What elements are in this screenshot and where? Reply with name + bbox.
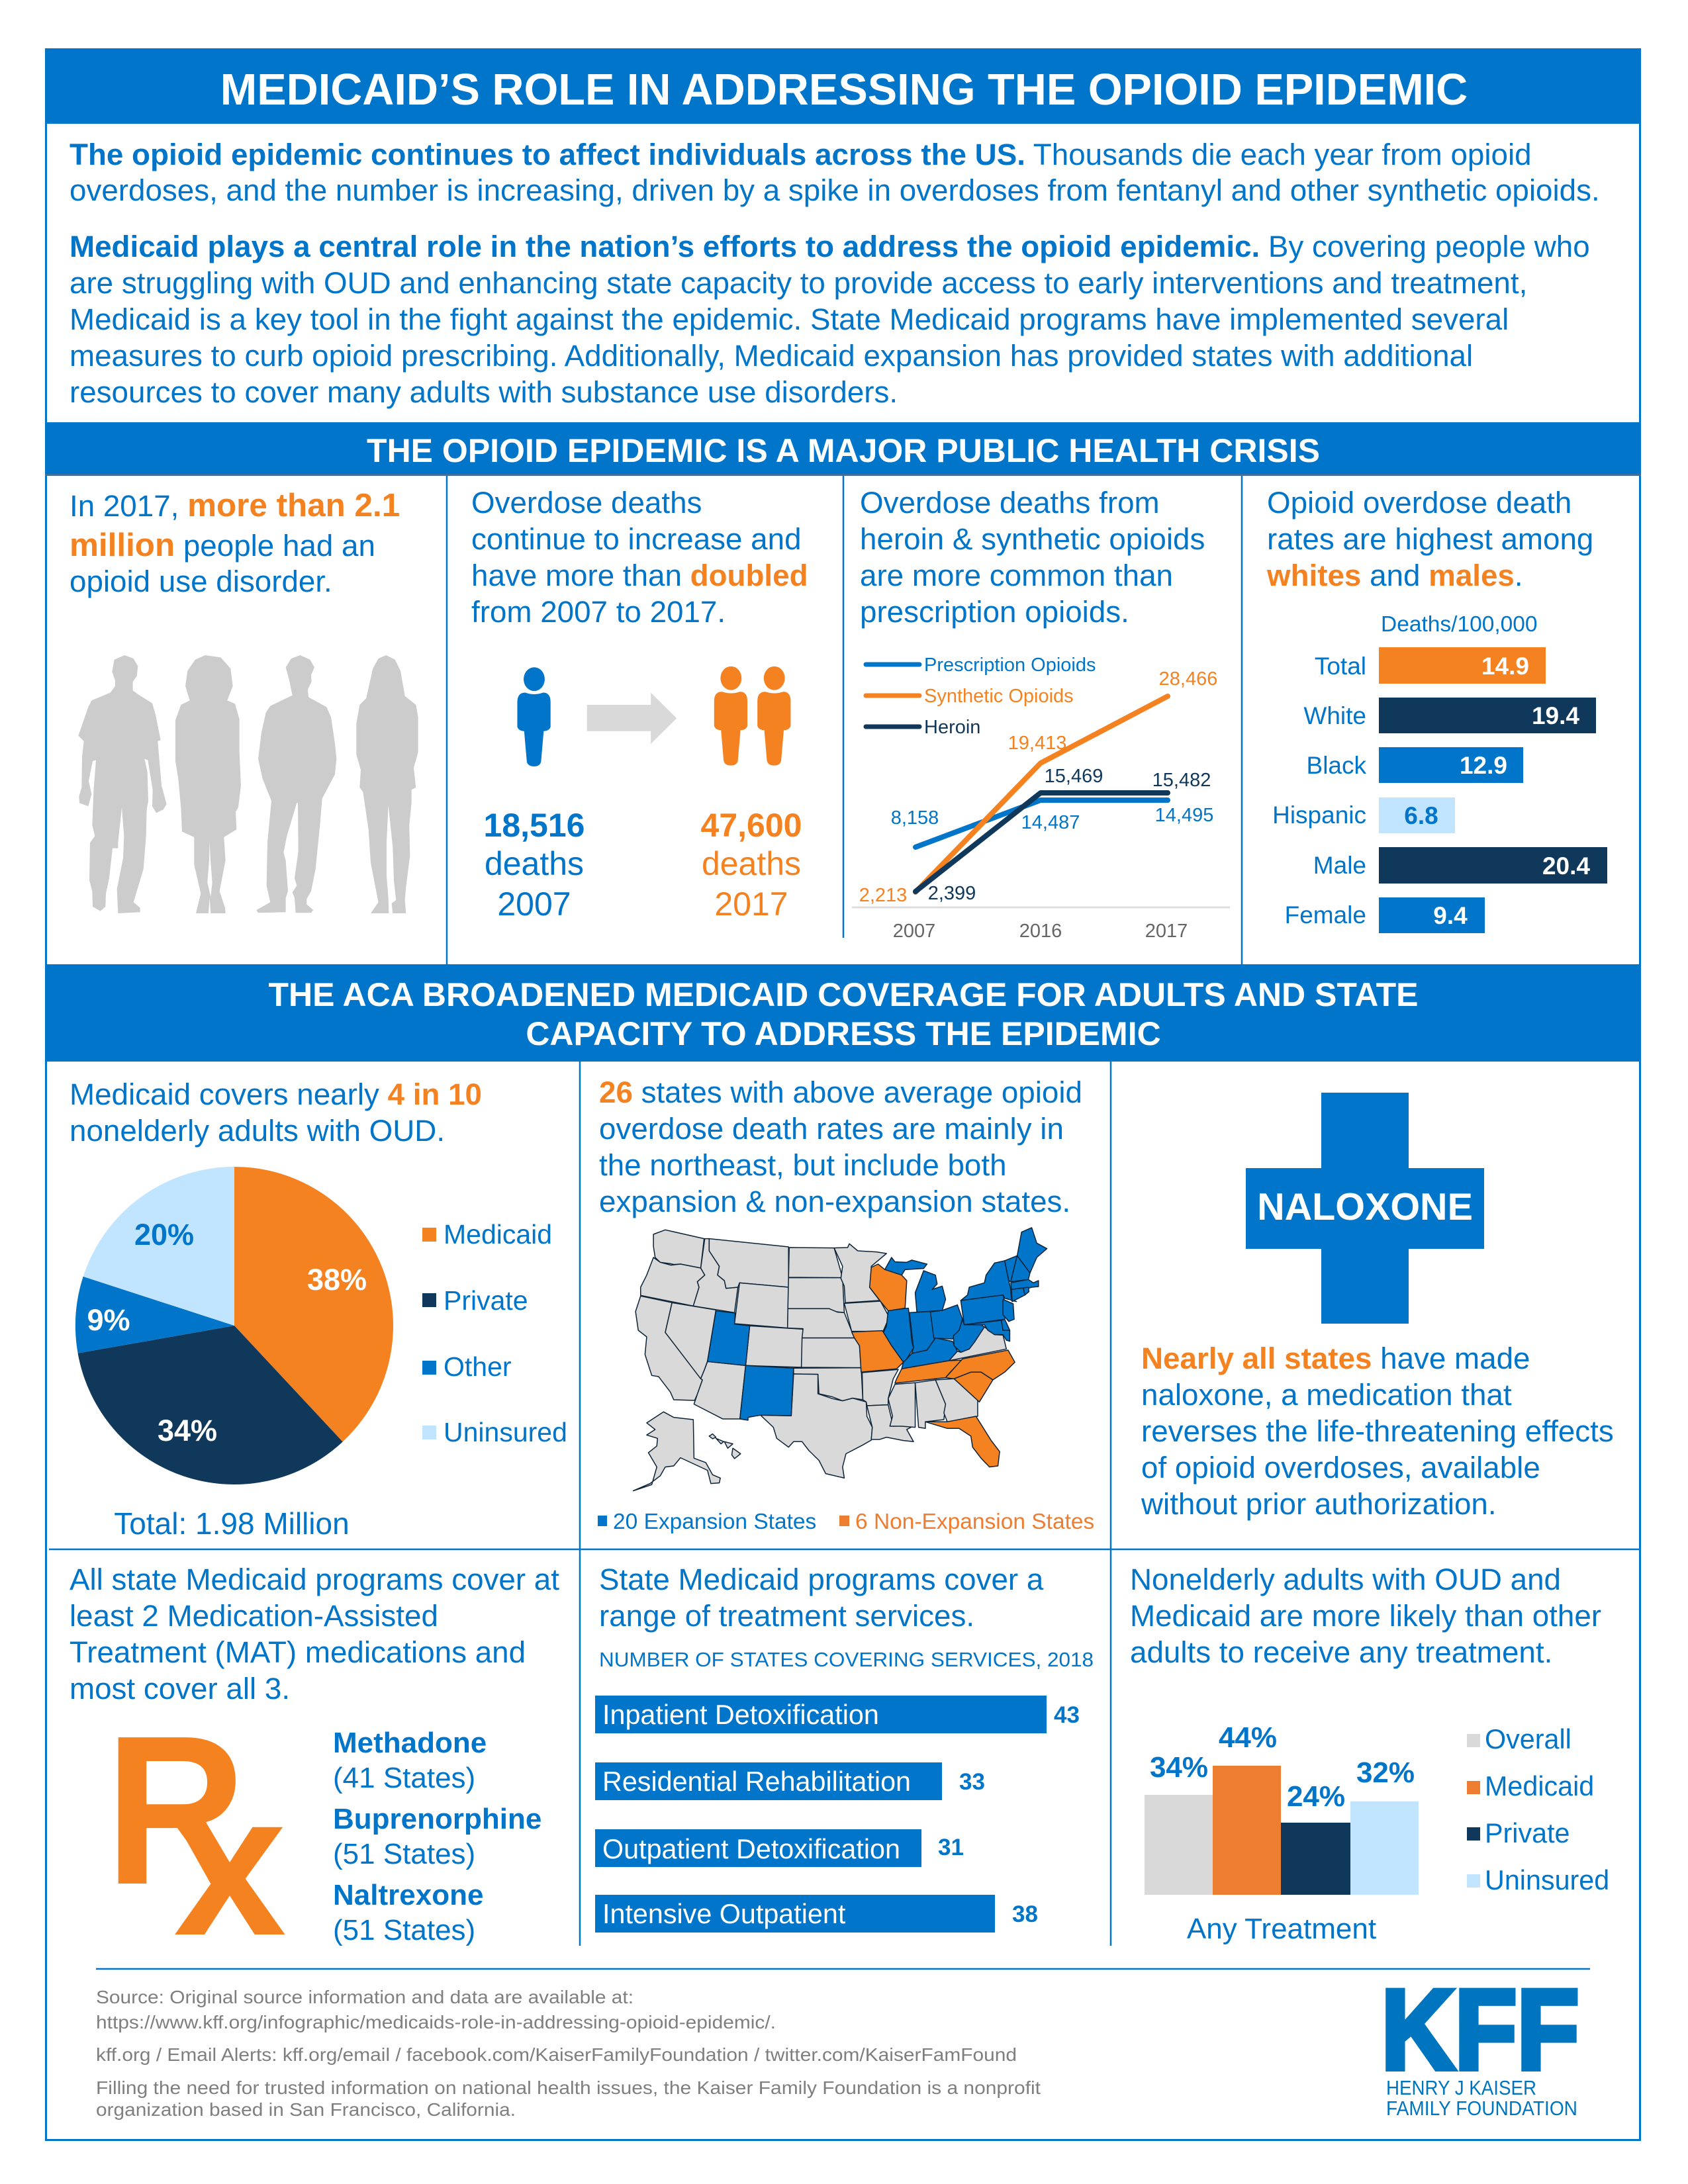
bar chart: deaths per 100,000: 12.9 (1460, 752, 1507, 779)
panel text: whites and males: whites and males. (1266, 559, 1523, 592)
bar chart: deaths per 100,000: 9.4 (1433, 902, 1468, 929)
line chart: overdose deaths by opioid: 8,158 (891, 807, 939, 829)
medication list: Methadone (333, 1727, 487, 1759)
line chart: overdose deaths by opioid: 19,413 (1008, 733, 1066, 754)
panel text: 26 states: overdose death rates are mainly in (599, 1112, 1064, 1146)
panel text: whites and males: Opioid overdose death (1267, 486, 1571, 520)
map legend: 6 Non-Expansion States (855, 1510, 1094, 1534)
panel text: deaths doubled: Overdose deaths (471, 486, 702, 520)
icon: person 2007 (517, 667, 551, 766)
panel text: MAT coverage: least 2 Medication-Assisted (70, 1599, 438, 1633)
panel: death rates by group (1266, 486, 1607, 933)
panel text: deaths doubled: have more than doubled (471, 559, 808, 592)
footer text: https://www.kff.org/infographic/medicaids-role-in-addressing-opioid-epidemic/. (96, 2012, 776, 2032)
line chart: overdose deaths by opioid: 2,213 (859, 885, 907, 906)
bar legend (1467, 1724, 1609, 1895)
bar chart: states covering services: Residential Rehabilitation (602, 1766, 911, 1797)
bar chart: deaths per 100,000: Deaths/100,000 (1381, 612, 1538, 637)
medication list (333, 1727, 541, 1946)
stat: 2017 deaths: 47,600 (701, 807, 802, 844)
section heading: public health crisis (45, 422, 1641, 476)
pie legend: Other (444, 1351, 512, 1382)
line chart: overdose deaths by opioid: 15,469 (1045, 766, 1103, 787)
panel text: deaths doubled (471, 486, 808, 629)
section heading: ACA broadened coverage: THE ACA BROADENED MEDICAID COVERAGE FOR ADULTS AND STATE (268, 976, 1419, 1013)
line chart: overdose deaths by opioid: 2016 (1019, 921, 1062, 942)
bar chart: any treatment: Any Treatment (1187, 1913, 1376, 1945)
intro text: The opioid epidemic continues to affect individuals across the US. Thousands die each year from opioid (70, 138, 1532, 171)
panel text: heroin and synthetic (860, 486, 1205, 629)
footer text (96, 1987, 1041, 2120)
map legend (598, 1510, 1094, 1534)
medication list: (41 States) (333, 1762, 475, 1794)
icon: Rx symbol: x (173, 1751, 288, 1978)
panel: MAT medications (70, 1563, 559, 1978)
line chart: overdose deaths by opioid: 15,482 (1152, 770, 1211, 791)
pie chart: coverage of adults with OUD (75, 1167, 393, 1484)
intro text: are struggling with OUD and enhancing state capacity to provide access to early interventions and treatment, (70, 266, 1527, 300)
logo: KFF: KFF (1381, 1966, 1579, 2093)
panel text: heroin and synthetic: are more common than (860, 559, 1173, 592)
intro text: Medicaid plays a central role in the nation’s efforts to address the opioid epidemic. By covering people who (70, 230, 1590, 263)
panel text: naloxone availability: of opioid overdoses, available (1141, 1451, 1540, 1484)
panel text: OUD statement (70, 487, 400, 598)
line chart: overdose deaths by opioid: 2007 (893, 921, 935, 942)
panel text: 26 states: 26 states with above average opioid (599, 1075, 1082, 1109)
panel text: naloxone availability: Nearly all states have made (1141, 1342, 1530, 1375)
bar chart: deaths per 100,000: White (1303, 702, 1366, 729)
panel text: MAT coverage: most cover all 3. (70, 1672, 290, 1706)
icon: two people 2017 (714, 666, 790, 766)
panel text: MAT coverage: All state Medicaid programs cover at (70, 1563, 559, 1596)
line chart: overdose deaths by opioid: 2,399 (928, 883, 976, 904)
logo: KFF: HENRY J KAISER (1386, 2076, 1536, 2099)
icon: naloxone cross: NALOXONE (1257, 1186, 1473, 1228)
bar chart: deaths per 100,000: Male (1313, 852, 1366, 879)
map: United States by expansion status (633, 1228, 1047, 1491)
panel text: treatment services: range of treatment services. (599, 1599, 974, 1633)
intro text: resources to cover many adults with substance use disorders. (70, 375, 898, 409)
line chart: overdose deaths by opioid (852, 655, 1230, 942)
bar chart: any treatment: 32% (1356, 1756, 1415, 1789)
chart subtitle: NUMBER OF STATES COVERING SERVICES, 2018 (599, 1648, 1094, 1671)
icon: Rx symbol (105, 1692, 288, 1978)
line chart: overdose deaths by opioid: Prescription Opioids (924, 655, 1096, 676)
map legend: 20 Expansion States (613, 1510, 816, 1534)
line chart: overdose deaths by opioid: Synthetic Opioids (924, 686, 1074, 707)
panel: overdose deaths doubled (471, 486, 808, 923)
panel text: 4 in 10: Medicaid covers nearly 4 in 10 (70, 1077, 482, 1111)
medication list: (51 States) (333, 1838, 475, 1870)
panel: treatment services (595, 1563, 1094, 1933)
bar chart: deaths per 100,000 (1272, 612, 1607, 933)
title banner (45, 48, 1641, 124)
pie total: Total: 1.98 Million (114, 1506, 350, 1541)
line chart: overdose deaths by opioid: Heroin (924, 717, 980, 738)
panel text: any treatment: adults to receive any treatment. (1130, 1635, 1552, 1669)
icon: four people silhouettes (78, 655, 418, 913)
stat: 2007 deaths: deaths (485, 845, 584, 882)
intro text: Medicaid is a key tool in the fight against the epidemic. State Medicaid programs have implemented several (70, 302, 1509, 336)
panel text: OUD statement: million people had an (70, 527, 375, 563)
medication list: Naltrexone (333, 1879, 483, 1911)
pie chart: coverage of adults with OUD: 34% (158, 1414, 217, 1447)
panel text: whites and males (1266, 486, 1593, 592)
panel: 2.1 million with OUD (70, 487, 418, 913)
bar chart: any treatment: 24% (1287, 1780, 1345, 1813)
bar legend: Medicaid (1485, 1771, 1594, 1801)
footer text: kff.org / Email Alerts: kff.org/email / facebook.com/KaiserFamilyFoundation / twitter.com/KaiserFamFound (96, 2044, 1017, 2065)
bar chart: any treatment (1145, 1721, 1419, 1945)
panel: Medicaid covers 4 in 10 (70, 1077, 567, 1541)
stat: 2017 deaths: deaths (702, 845, 801, 882)
intro text (70, 138, 1600, 409)
panel text: MAT coverage (70, 1563, 559, 1706)
bar legend: Overall (1485, 1724, 1571, 1754)
bar chart: deaths per 100,000: 19.4 (1532, 702, 1579, 729)
panel text: heroin and synthetic: Overdose deaths from (860, 486, 1160, 520)
panel text: OUD statement: opioid use disorder. (70, 565, 332, 598)
medication list: Buprenorphine (333, 1803, 541, 1835)
panel: map of 26 states (598, 1075, 1094, 1534)
panel text: treatment services (599, 1563, 1044, 1633)
section heading: ACA broadened coverage: CAPACITY TO ADDRESS THE EPIDEMIC (526, 1015, 1161, 1052)
footer text: Filling the need for trusted information on national health issues, the Kaiser Family Foundation is a nonprofit (96, 2077, 1041, 2098)
panel: any treatment (1130, 1563, 1609, 1945)
stat: 2017 deaths: 2017 (714, 886, 788, 923)
bar chart: states covering services (595, 1696, 1080, 1933)
panel text: 4 in 10: nonelderly adults with OUD. (70, 1114, 445, 1148)
bar chart: deaths per 100,000: Total (1315, 653, 1366, 680)
panel text: treatment services: State Medicaid programs cover a (599, 1563, 1044, 1596)
footer text: Source: Original source information and data are available at: (96, 1987, 633, 2007)
pie chart: coverage of adults with OUD: 9% (87, 1303, 130, 1337)
panel text: any treatment: Nonelderly adults with OUD and (1130, 1563, 1561, 1596)
bar chart: states covering services: 33 (959, 1769, 985, 1795)
panel text: OUD statement: In 2017, more than 2.1 (70, 487, 400, 523)
bar chart: deaths per 100,000: 6.8 (1404, 802, 1438, 829)
pie chart: coverage of adults with OUD: 20% (134, 1218, 194, 1251)
bar chart: states covering services: 31 (938, 1835, 964, 1860)
panel text: deaths doubled: continue to increase and (471, 522, 802, 556)
panel text: any treatment: Medicaid are more likely than other (1130, 1599, 1601, 1633)
line chart: overdose deaths by opioid: 14,487 (1021, 812, 1080, 833)
panel text: deaths doubled: from 2007 to 2017. (471, 595, 726, 629)
bar chart: deaths per 100,000: 20.4 (1542, 852, 1590, 880)
panel: naloxone (1141, 1093, 1614, 1521)
bar chart: states covering services: 43 (1054, 1702, 1080, 1728)
line chart: overdose deaths by opioid: 28,466 (1159, 668, 1217, 690)
panel text: MAT coverage: Treatment (MAT) medications and (70, 1635, 526, 1669)
panel text: naloxone availability: reverses the life-threatening effects (1141, 1414, 1614, 1448)
bar legend: Private (1485, 1818, 1570, 1848)
stat: 2007 deaths: 2007 (497, 886, 571, 923)
pie chart: coverage of adults with OUD: 38% (307, 1263, 367, 1297)
stat: 2017 deaths (701, 807, 802, 923)
bar chart: states covering services: Inpatient Detoxification (602, 1700, 879, 1730)
medication list: (51 States) (333, 1914, 475, 1946)
bar chart: deaths per 100,000: 14.9 (1481, 653, 1529, 680)
panel text: naloxone availability: without prior authorization. (1141, 1487, 1497, 1521)
panel text: any treatment (1130, 1563, 1601, 1669)
panel text: naloxone availability: naloxone, a medication that (1141, 1378, 1512, 1412)
panel text: whites and males: rates are highest among (1267, 522, 1593, 556)
footer text: organization based in San Francisco, California. (96, 2099, 516, 2120)
logo: KFF: FAMILY FOUNDATION (1386, 2097, 1577, 2120)
panel: heroin and synthetic opioids (852, 486, 1230, 942)
panel text: heroin and synthetic: prescription opioids. (860, 595, 1129, 629)
bar chart: states covering services: 38 (1012, 1901, 1038, 1927)
stat: 2007 deaths (484, 807, 585, 923)
bar chart: deaths per 100,000: Black (1307, 752, 1366, 779)
panel text: heroin and synthetic: heroin & synthetic opioids (860, 522, 1205, 556)
bar chart: any treatment: 34% (1150, 1751, 1208, 1784)
panel text: 26 states: expansion & non-expansion states. (599, 1185, 1070, 1218)
bar chart: states covering services: Intensive Outpatient (602, 1899, 846, 1929)
stat: 2007 deaths: 18,516 (484, 807, 585, 844)
line chart: overdose deaths by opioid: 2017 (1145, 921, 1188, 942)
intro text: measures to curb opioid prescribing. Additionally, Medicaid expansion has provided states with additional (70, 339, 1473, 373)
panel text: 26 states: the northeast, but include both (599, 1148, 1007, 1182)
icon: Rx symbol: R (105, 1692, 246, 1929)
bar chart: deaths per 100,000: Hispanic (1272, 801, 1366, 829)
panel text: naloxone availability (1141, 1342, 1614, 1521)
title banner: MEDICAID’S ROLE IN ADDRESSING THE OPIOID EPIDEMIC (220, 66, 1468, 114)
bar chart: deaths per 100,000: Female (1285, 901, 1366, 929)
bar chart: any treatment: 44% (1219, 1721, 1277, 1754)
arrow: increase (587, 693, 677, 744)
panel text: 26 states (599, 1075, 1082, 1218)
icon: naloxone cross (1246, 1093, 1484, 1324)
intro text: overdoses, and the number is increasing, driven by a spike in overdoses from fentanyl and other synthetic opioids. (70, 173, 1600, 207)
pie legend (422, 1219, 567, 1447)
panel text: 4 in 10 (70, 1077, 482, 1148)
line chart: overdose deaths by opioid: 14,495 (1155, 805, 1213, 826)
section heading: public health crisis: THE OPIOID EPIDEMIC IS A MAJOR PUBLIC HEALTH CRISIS (367, 432, 1320, 469)
bar chart: states covering services: Outpatient Detoxification (602, 1834, 900, 1864)
pie legend: Medicaid (444, 1219, 552, 1250)
bar legend: Uninsured (1485, 1865, 1609, 1895)
section heading: ACA broadened coverage (45, 964, 1641, 1062)
pie legend: Private (444, 1285, 528, 1316)
pie legend: Uninsured (444, 1417, 567, 1447)
